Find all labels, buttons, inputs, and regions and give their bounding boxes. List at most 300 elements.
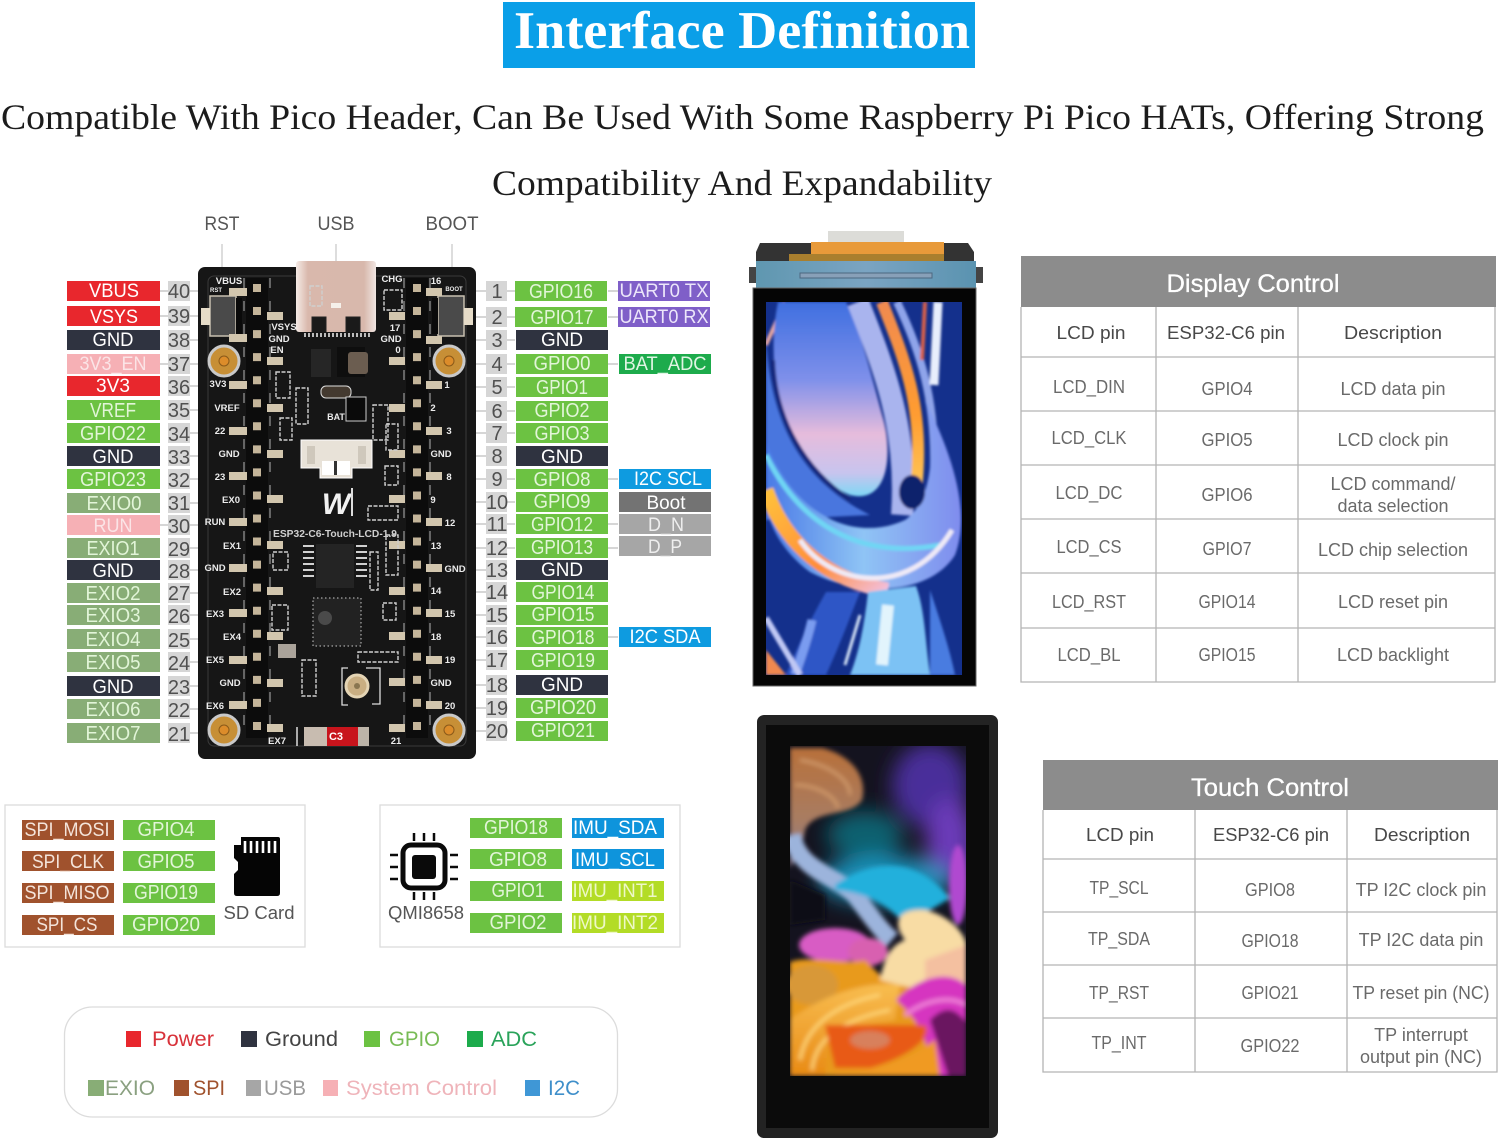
silkscreen pin labels: EX2 — [223, 587, 241, 598]
column headings: Description — [1374, 824, 1470, 845]
pin 18 GND: GND — [541, 675, 583, 696]
SPI_CLK row: GPIO5 — [138, 851, 194, 873]
pin 29 EXIO1 — [67, 538, 190, 561]
pin 31 EXIO0 — [67, 493, 190, 515]
silkscreen pin labels: EX0 — [222, 495, 240, 506]
pin 26 EXIO3 — [67, 605, 190, 628]
column headings: LCD pin — [1056, 322, 1126, 343]
row: TP_SDA — [1088, 929, 1483, 951]
pin 11 GPIO12 with D_N: D_N — [648, 515, 684, 536]
pin 30 RUN: 30 — [168, 516, 190, 538]
ESP32-C6 board — [198, 261, 476, 759]
row: LCD_DIN: GPIO4 — [1202, 379, 1252, 399]
table header: Touch Control: Touch Control — [1191, 774, 1349, 802]
pin 8 GND: 8 — [491, 446, 503, 468]
silkscreen pin labels: 12 — [445, 518, 455, 529]
orange flex cable — [811, 242, 944, 256]
pin 37 3V3_EN: 3V3_EN — [80, 354, 146, 375]
pin 12 GPIO13 with D_P: 12 — [486, 538, 508, 560]
pin 33 GND — [67, 446, 190, 469]
pin 9 GPIO8 with I2C SCL — [486, 469, 711, 491]
pin 18 GND: 18 — [486, 675, 508, 697]
GPIO8 / IMU_SCL row — [470, 849, 664, 871]
touch display module — [757, 715, 998, 1138]
battery connector — [301, 440, 372, 478]
pin 36 3V3: 3V3 — [96, 376, 130, 397]
pin 29 EXIO1: 29 — [168, 539, 190, 561]
pin 33 GND: 33 — [168, 447, 190, 469]
pin 20 GPIO21: 20 — [486, 721, 508, 743]
pin 16 GPIO18 with I2C SDA: 16 — [486, 627, 508, 649]
panel: QMI8658 IMU pins — [380, 805, 680, 947]
pin 2 GPIO17 with UART0 RX — [486, 307, 710, 329]
SPI_MISO row: SPI_MISO — [24, 883, 110, 904]
pin 39 VSYS: VSYS — [90, 307, 138, 328]
SPI_MOSI row: GPIO4 — [138, 819, 194, 841]
pin 10 GPIO9 with Boot — [486, 491, 711, 514]
SPI_CS row — [22, 914, 215, 936]
row: TP_INT: TP_INT — [1092, 1033, 1146, 1054]
silkscreen pin labels: BAT — [327, 412, 345, 422]
silkscreen pin labels: 16 — [431, 276, 441, 287]
legend: GPIO — [364, 1028, 440, 1051]
silkscreen pin labels: EX5 — [206, 655, 225, 666]
row: LCD_BL: LCD backlight — [1337, 645, 1449, 665]
pin 40 VBUS: 40 — [168, 281, 190, 303]
pin 2 GPIO17 with UART0 RX: 2 — [491, 307, 503, 329]
pin 11 GPIO12 with D_N — [486, 514, 711, 536]
silkscreen pin labels: 21 — [391, 736, 402, 747]
row: TP_INT: TP interrupt — [1374, 1025, 1468, 1045]
pin 26 EXIO3: EXIO3 — [86, 605, 140, 627]
board top labels: RST, USB, BOOT: USB — [318, 214, 354, 235]
silkscreen pin labels: 3V3 — [210, 379, 226, 390]
silkscreen pin labels: EX7 — [268, 736, 286, 747]
board top labels: RST, USB, BOOT: BOOT — [426, 214, 479, 235]
pin 12 GPIO13 with D_P — [486, 536, 711, 560]
pin 14 GPIO14: 14 — [486, 582, 508, 604]
pin 2 GPIO17 with UART0 RX: UART0 RX — [620, 307, 709, 328]
legend: System Control: System Control — [346, 1077, 497, 1100]
SPI_CS row: SPI_CS — [36, 915, 98, 936]
silkscreen pin labels — [204, 274, 466, 747]
row: LCD_BL: GPIO15 — [1198, 645, 1256, 665]
pin 38 GND: 38 — [168, 330, 190, 352]
silkscreen pin labels: 17 — [390, 323, 400, 334]
silkscreen pin labels: EX3 — [206, 609, 224, 620]
pin 30 RUN: RUN — [94, 516, 132, 537]
pin 28 GND: 28 — [168, 561, 190, 583]
solder pads — [229, 292, 442, 728]
pin 38 GND: GND — [92, 330, 134, 351]
legend: Power — [126, 1028, 214, 1051]
SPI_MISO row — [22, 882, 215, 904]
pin 2 GPIO17 with UART0 RX: GPIO17 — [530, 307, 594, 329]
pin 30 RUN — [67, 515, 190, 538]
pin 17 GPIO19: GPIO19 — [531, 650, 595, 672]
legend: Ground: Ground — [265, 1028, 338, 1051]
pin 34 GPIO22: 34 — [168, 424, 190, 446]
silkscreen pin labels: 14 — [431, 586, 442, 597]
silkscreen pin labels: EX6 — [206, 701, 224, 712]
silkscreen pin labels: 2 — [430, 403, 436, 414]
pin 15 GPIO15: 15 — [486, 605, 508, 627]
pin 19 GPIO20: 19 — [486, 698, 508, 720]
legend: I2C: I2C — [548, 1077, 580, 1100]
row: TP_RST: GPIO21 — [1242, 983, 1298, 1003]
pin 35 VREF: VREF — [90, 400, 136, 422]
GPIO8 / IMU_SCL row: GPIO8 — [489, 849, 547, 871]
pin 31 EXIO0: 31 — [168, 493, 190, 515]
silkscreen pin labels: EX1 — [223, 541, 242, 552]
pin 14 GPIO14: GPIO14 — [532, 582, 594, 604]
GPIO1 / IMU_INT1 row — [470, 880, 664, 902]
GPIO18 / IMU_SDA row: IMU_SDA — [573, 818, 657, 839]
row: LCD_DC: LCD command/ — [1330, 474, 1456, 494]
silkscreen pin labels: 1 — [444, 380, 450, 391]
pin 22 EXIO6 — [67, 699, 190, 722]
silkscreen pin labels: GND — [380, 334, 402, 345]
pin 4 GPIO0 with BAT_ADC — [486, 353, 711, 376]
silkscreen pin labels: GND — [444, 564, 466, 575]
silkscreen pin labels: 22 — [215, 426, 225, 437]
row: LCD_RST: LCD reset pin — [1338, 592, 1448, 612]
silkscreen pin labels: GND — [268, 334, 290, 345]
pin 17 GPIO19 — [486, 650, 608, 672]
pin 40 VBUS — [67, 281, 190, 303]
board top labels: RST, USB, BOOT — [204, 214, 479, 310]
row: LCD_DC: data selection — [1337, 496, 1449, 516]
pin 13 GND — [486, 560, 608, 582]
pin 12 GPIO13 with D_P: D_P — [648, 537, 682, 558]
screen wallpaper — [786, 743, 974, 1076]
pin 34 GPIO22: GPIO22 — [80, 423, 146, 445]
silkscreen pin labels: VSYS — [271, 322, 297, 333]
title banner: Interface Definition — [514, 2, 970, 60]
row: TP_RST: TP_RST — [1089, 983, 1149, 1004]
icon: chip — [390, 833, 458, 900]
subtitle: Compatible With Pico Header, Can Be Used With Some Raspberry Pi Pico HATs, Offering Strong — [1, 97, 1484, 137]
silkscreen pin labels: GND — [204, 563, 226, 574]
pin 10 GPIO9 with Boot: Boot — [646, 493, 686, 514]
legend: GPIO: GPIO — [389, 1028, 440, 1051]
table header: Touch Control — [1043, 760, 1498, 810]
table header: Display Control — [1021, 256, 1496, 307]
pin 36 3V3 — [67, 376, 190, 399]
legend — [64, 1007, 618, 1117]
glass edge — [756, 261, 976, 288]
pin 11 GPIO12 with D_N: 11 — [487, 514, 507, 536]
silkscreen pin labels: 3 — [446, 426, 452, 437]
LCD bare display module — [749, 231, 983, 686]
row: TP_INT: GPIO22 — [1240, 1036, 1300, 1056]
legend: USB: USB — [264, 1077, 306, 1100]
legend: ADC: ADC — [491, 1028, 537, 1051]
row: TP_SDA: GPIO18 — [1242, 931, 1298, 951]
row: TP_RST — [1089, 983, 1490, 1004]
row: LCD_CLK: GPIO5 — [1202, 430, 1252, 450]
ICs and footprints — [272, 286, 402, 705]
pin 17 GPIO19: 17 — [486, 650, 508, 672]
table grid — [1043, 810, 1497, 1072]
silkscreen pin labels: 8 — [446, 472, 452, 483]
pin 25 EXIO4 — [67, 629, 190, 652]
row: LCD_CS: GPIO7 — [1202, 539, 1252, 559]
pin 23 GND — [67, 676, 190, 699]
silkscreen pin labels: 20 — [445, 701, 455, 712]
Touch Control table — [1043, 760, 1498, 1072]
board top labels: RST, USB, BOOT: RST — [204, 214, 240, 235]
GPIO18 / IMU_SDA row — [470, 817, 664, 839]
subtitle: Compatibility And Expandability — [492, 163, 992, 203]
row: LCD_CS: LCD_CS — [1056, 537, 1122, 558]
left pin labels — [67, 281, 190, 746]
C3 chip marking — [297, 727, 369, 746]
pin 13 GND: 13 — [486, 560, 508, 582]
pin 9 GPIO8 with I2C SCL: GPIO8 — [534, 469, 590, 491]
buttons RST and BOOT — [201, 296, 473, 336]
pin 21 EXIO7: 21 — [168, 724, 190, 746]
pin 10 GPIO9 with Boot: GPIO9 — [534, 491, 590, 513]
row: LCD_CLK — [1052, 428, 1449, 450]
silkscreen pin labels: CHG — [381, 274, 403, 285]
C3 chip marking: C3 — [329, 731, 343, 743]
pin 31 EXIO0: EXIO0 — [86, 493, 142, 515]
pin 21 EXIO7 — [67, 723, 190, 746]
pin 27 EXIO2: EXIO2 — [86, 583, 140, 605]
pin 19 GPIO20 — [486, 697, 608, 720]
pin 10 GPIO9 with Boot: 10 — [486, 492, 508, 514]
legend: I2C — [525, 1077, 580, 1100]
pin 32 GPIO23: GPIO23 — [80, 469, 146, 491]
pin 5 GPIO1 — [486, 377, 608, 399]
pin 24 EXIO5: 24 — [168, 653, 190, 675]
silkscreen pin labels: GND — [219, 678, 241, 689]
USB-C connector — [296, 261, 376, 335]
silkscreen pin labels: GND — [430, 449, 452, 460]
silkscreen pin labels: EX4 — [223, 632, 242, 643]
SPI_MISO row: GPIO19 — [134, 882, 198, 904]
legend: SPI: SPI — [193, 1077, 225, 1100]
SPI_CS row: GPIO20 — [132, 914, 200, 936]
row: LCD_DIN: LCD data pin — [1340, 379, 1446, 399]
column headings: ESP32-C6 pin — [1167, 322, 1285, 343]
row: LCD_RST — [1052, 592, 1448, 613]
row: LCD_RST: GPIO14 — [1198, 592, 1256, 612]
silkscreen pin labels: 0 — [395, 345, 401, 356]
row: LCD_DC — [1056, 474, 1456, 516]
silkscreen pin labels: 19 — [445, 655, 455, 666]
pin 1 GPIO16 with UART0 TX: 1 — [491, 281, 503, 303]
pin 3 GND: 3 — [491, 330, 503, 352]
pin 16 GPIO18 with I2C SDA: I2C SDA — [630, 627, 701, 648]
pin 25 EXIO4: EXIO4 — [86, 629, 140, 651]
row: TP_SCL: TP I2C clock pin — [1356, 880, 1486, 900]
pin 7 GPIO3: 7 — [491, 423, 503, 445]
GPIO18 / IMU_SDA row: GPIO18 — [484, 817, 548, 839]
connector tab — [828, 231, 904, 243]
pin 5 GPIO1: 5 — [491, 377, 503, 399]
pin 24 EXIO5: EXIO5 — [86, 652, 140, 674]
pin 22 EXIO6: 22 — [168, 700, 190, 722]
legend: Power: Power — [152, 1028, 214, 1051]
row: LCD_BL: LCD_BL — [1058, 645, 1120, 666]
column headings: Description — [1344, 322, 1442, 343]
pin 39 VSYS: 39 — [168, 306, 190, 328]
pin 1 GPIO16 with UART0 TX: GPIO16 — [529, 281, 593, 303]
column headings: ESP32-C6 pin — [1213, 824, 1329, 845]
row: TP_SDA: TP_SDA — [1088, 929, 1150, 950]
pin 25 EXIO4: 25 — [168, 630, 190, 652]
GPIO2 / IMU_INT2 row: IMU_INT2 — [572, 913, 658, 934]
GPIO2 / IMU_INT2 row: GPIO2 — [490, 912, 546, 934]
GPIO8 / IMU_SCL row: IMU_SCL — [575, 850, 655, 871]
silkscreen pin labels: GND — [218, 449, 240, 460]
row: TP_SCL: GPIO8 — [1245, 880, 1295, 900]
board name: ESP32-C6-Touch-LCD-1.9 — [273, 528, 397, 540]
SPI_CLK row: SPI_CLK — [32, 852, 104, 873]
pin 6 GPIO2: GPIO2 — [534, 400, 590, 422]
row: TP_SCL: TP_SCL — [1090, 878, 1148, 899]
pin 40 VBUS: VBUS — [89, 281, 139, 302]
pin 28 GND: GND — [92, 561, 134, 582]
legend: ADC — [467, 1028, 537, 1051]
row: TP_INT — [1092, 1025, 1482, 1067]
pin 8 GND: GND — [541, 447, 583, 468]
row: LCD_CS — [1056, 537, 1468, 560]
connector lines — [160, 291, 618, 733]
pin 24 EXIO5 — [67, 652, 190, 675]
pin 7 GPIO3: GPIO3 — [534, 423, 590, 445]
GPIO1 / IMU_INT1 row: GPIO1 — [492, 880, 544, 902]
pin 28 GND — [67, 560, 190, 583]
pin 3 GND: GND — [541, 330, 583, 351]
pin 3 GND — [486, 330, 608, 352]
row: TP_INT: output pin (NC) — [1360, 1047, 1482, 1067]
legend: USB — [246, 1077, 306, 1100]
pin 26 EXIO3: 26 — [168, 606, 190, 628]
silkscreen pin labels: BOOT — [445, 287, 463, 293]
pin 35 VREF — [67, 400, 190, 422]
silkscreen pin labels: VREF — [214, 403, 240, 414]
pin 18 GND — [486, 675, 608, 697]
column headings — [1086, 824, 1470, 845]
pin 11 GPIO12 with D_N: GPIO12 — [531, 514, 593, 536]
pin 23 GND: GND — [92, 677, 134, 698]
QMI8658 label: QMI8658 — [388, 903, 464, 923]
silkscreen pin labels: VBUS — [216, 276, 242, 287]
pin 37 3V3_EN — [67, 354, 190, 376]
pin 36 3V3: 36 — [168, 377, 190, 399]
row: LCD_DIN: LCD_DIN — [1053, 377, 1125, 398]
row: LCD_DC: GPIO6 — [1202, 485, 1252, 505]
pin 4 GPIO0 with BAT_ADC: GPIO0 — [534, 353, 590, 375]
silkscreen pin labels: GND — [430, 678, 452, 689]
silkscreen pin labels: EN — [270, 345, 284, 356]
pin 20 GPIO21: GPIO21 — [531, 720, 595, 742]
column headings: LCD pin — [1086, 824, 1154, 845]
pin 15 GPIO15 — [486, 604, 608, 627]
pin 1 GPIO16 with UART0 TX — [486, 281, 710, 303]
Waveshare logo: W — [322, 488, 353, 521]
column headings — [1056, 322, 1442, 343]
Display Control table — [1021, 256, 1496, 682]
pin 4 GPIO0 with BAT_ADC: BAT_ADC — [624, 354, 706, 375]
right pin labels — [486, 281, 711, 743]
pin 9 GPIO8 with I2C SCL: 9 — [491, 469, 503, 491]
pin 8 GND — [486, 446, 608, 468]
pin 34 GPIO22 — [67, 423, 190, 446]
SPI_MOSI row: SPI_MOSI — [24, 820, 110, 841]
pin 29 EXIO1: EXIO1 — [86, 538, 140, 560]
GPIO1 / IMU_INT1 row: IMU_INT1 — [572, 881, 658, 902]
SD Card label: SD Card — [224, 903, 294, 923]
row: LCD_DC: LCD_DC — [1056, 483, 1122, 504]
black bezel — [753, 288, 976, 686]
panel: SD card pins — [5, 805, 305, 947]
legend: SPI — [174, 1077, 225, 1100]
pin 16 GPIO18 with I2C SDA: GPIO18 — [532, 627, 594, 649]
silkscreen pin labels: RST — [210, 288, 222, 294]
pin header strips — [244, 278, 430, 738]
pin 33 GND: GND — [92, 447, 134, 468]
pin 15 GPIO15: GPIO15 — [532, 604, 594, 626]
pin 35 VREF: 35 — [168, 400, 190, 422]
silkscreen pin labels: 9 — [430, 495, 436, 506]
pin 6 GPIO2: 6 — [491, 401, 503, 423]
pin 20 GPIO21 — [486, 720, 608, 743]
screen wallpaper — [766, 302, 962, 675]
row: LCD_CLK: LCD_CLK — [1052, 428, 1126, 449]
row: TP_SDA: TP I2C data pin — [1359, 930, 1483, 950]
pin 38 GND — [67, 330, 190, 352]
pin 37 3V3_EN: 37 — [168, 354, 190, 376]
subtitle — [1, 97, 1484, 203]
row: TP_RST: TP reset pin (NC) — [1352, 983, 1490, 1003]
SPI_MOSI row — [22, 819, 215, 841]
silkscreen pin labels: 23 — [215, 472, 225, 483]
pin 32 GPIO23: 32 — [168, 470, 190, 492]
row: LCD_DIN — [1053, 377, 1446, 399]
pin 39 VSYS — [67, 306, 190, 328]
silkscreen pin labels: 15 — [445, 609, 456, 620]
pin 27 EXIO2 — [67, 583, 190, 605]
pin 16 GPIO18 with I2C SDA — [486, 627, 711, 649]
row: LCD_CLK: LCD clock pin — [1337, 430, 1449, 450]
pin 4 GPIO0 with BAT_ADC: 4 — [491, 354, 503, 376]
silkscreen pin labels: 18 — [431, 632, 441, 643]
pin 19 GPIO20: GPIO20 — [530, 697, 596, 719]
pin 1 GPIO16 with UART0 TX: UART0 TX — [620, 281, 709, 302]
GPIO2 / IMU_INT2 row — [470, 912, 664, 934]
pin 7 GPIO3 — [486, 423, 608, 445]
table grid — [1021, 307, 1495, 682]
pin 27 EXIO2: 27 — [168, 583, 190, 605]
pin 23 GND: 23 — [168, 677, 190, 699]
row: LCD_RST: LCD_RST — [1052, 592, 1126, 613]
row: LCD_CS: LCD chip selection — [1318, 540, 1468, 560]
pin 9 GPIO8 with I2C SCL: I2C SCL — [634, 469, 702, 490]
row: TP_SCL — [1090, 878, 1486, 900]
icon: SD card — [234, 837, 280, 896]
pin 5 GPIO1: GPIO1 — [536, 377, 588, 399]
pin 14 GPIO14 — [486, 582, 608, 604]
pin 21 EXIO7: EXIO7 — [86, 723, 140, 745]
pin 13 GND: GND — [541, 560, 583, 581]
pin 12 GPIO13 with D_P: GPIO13 — [531, 537, 593, 559]
silkscreen pin labels: 13 — [431, 541, 441, 552]
table header: Display Control: Display Control — [1166, 270, 1340, 298]
